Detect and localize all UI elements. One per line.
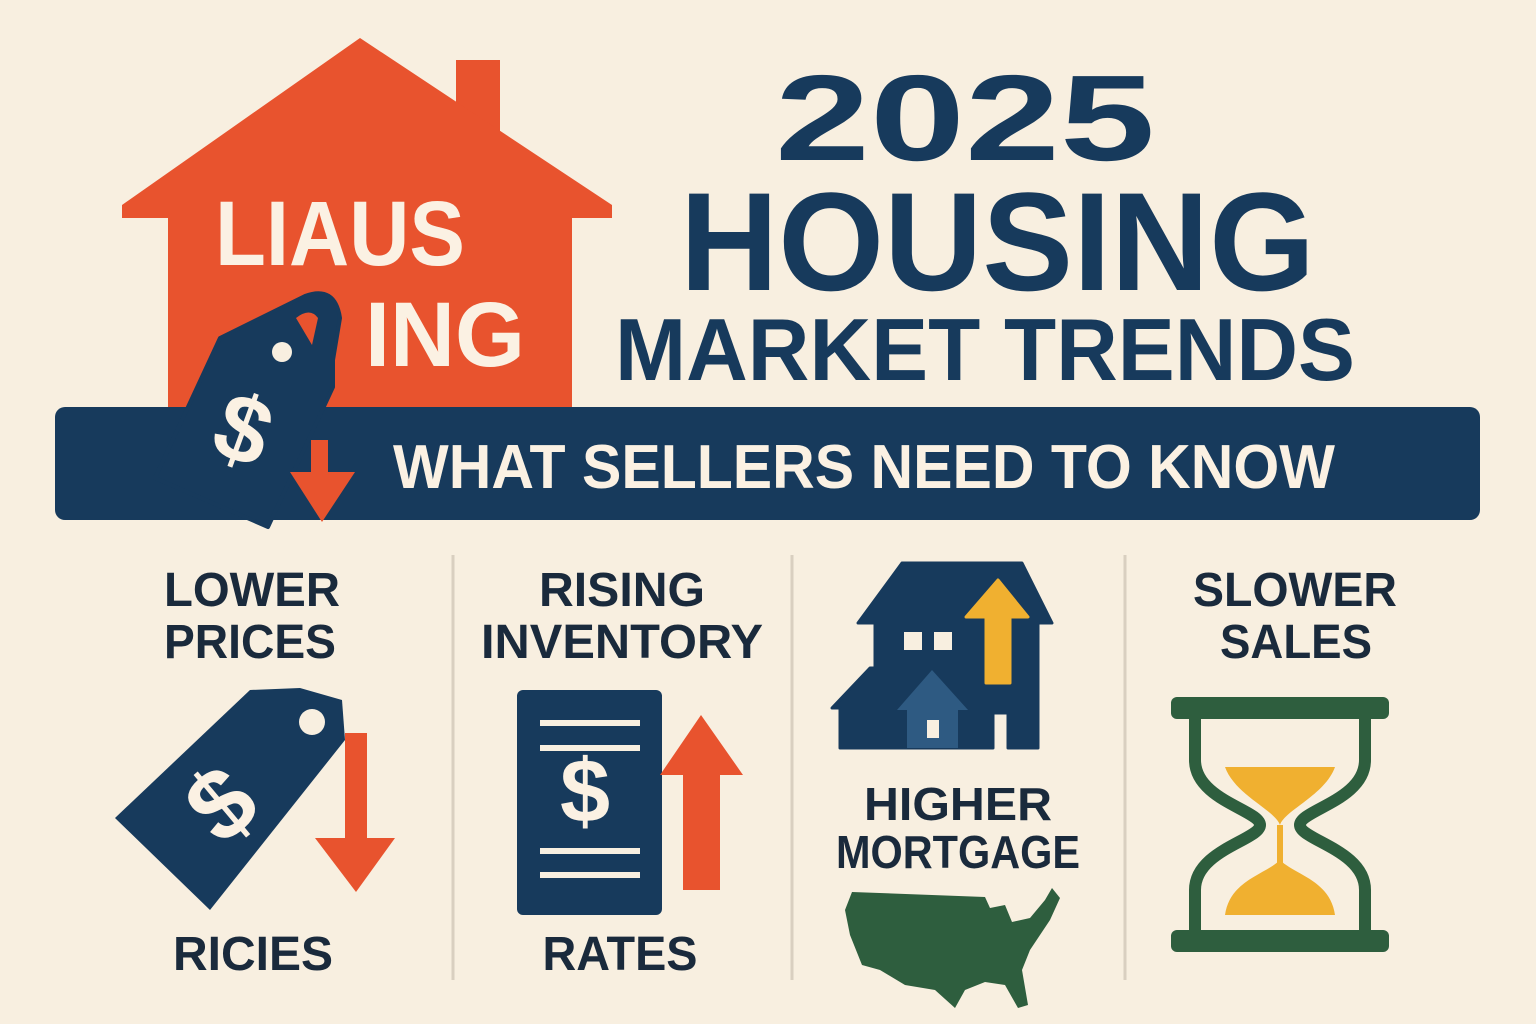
panel: lower prices <box>115 564 395 981</box>
icon: document <box>517 690 662 915</box>
icon: houses <box>832 563 1052 748</box>
icon: price tag <box>115 688 345 910</box>
panel: slower sales: SLOWER <box>1193 564 1397 617</box>
arrow: down <box>315 733 395 892</box>
icon: price tag on house: $ <box>200 371 286 489</box>
panel: rising inventory: RATES <box>542 928 698 981</box>
house text: LIAUS: LIAUS <box>215 183 465 285</box>
panel: higher mortgage: MORTGAGE <box>836 826 1080 878</box>
icon: document: $ <box>560 742 610 842</box>
panel: slower sales: SALES <box>1220 616 1372 669</box>
panel: lower prices: LOWER <box>164 564 340 617</box>
panel: lower prices: RICIES <box>173 928 333 981</box>
title: 2025 <box>775 50 1155 186</box>
panel: slower sales <box>1171 564 1397 952</box>
panel: rising inventory: RISING <box>539 564 705 617</box>
panel: higher mortgage: HIGHER <box>864 778 1052 830</box>
banner: WHAT SELLERS NEED TO KNOW <box>393 433 1335 502</box>
title: MARKET TRENDS <box>615 300 1355 399</box>
arrow: up <box>660 715 743 890</box>
banner <box>55 407 1480 520</box>
icon: us map <box>845 888 1060 1008</box>
house graphic <box>122 38 612 410</box>
panel: higher mortgage <box>832 563 1080 1008</box>
title <box>615 50 1355 399</box>
icon: hourglass <box>1171 697 1389 952</box>
panel: rising inventory <box>481 564 763 981</box>
icon: price tag: $ <box>164 743 279 865</box>
icon: price tag on house <box>155 293 355 527</box>
house text: ING: ING <box>365 284 525 386</box>
panel: lower prices: PRICES <box>164 616 336 669</box>
panel: rising inventory: INVENTORY <box>481 616 763 669</box>
title: HOUSING <box>680 163 1315 320</box>
